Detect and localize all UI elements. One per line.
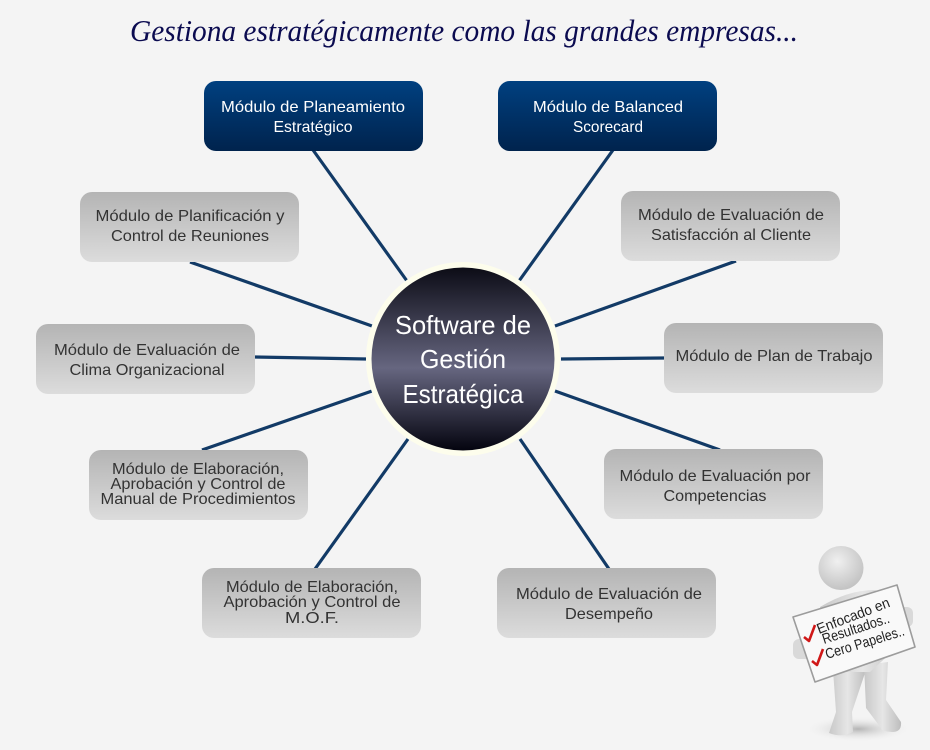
figure: right hand (895, 607, 913, 627)
module: Satisfacción al Cliente (621, 191, 840, 261)
module: Desempeño (497, 568, 716, 638)
figure: sign (793, 585, 915, 682)
figure: sign text: Resultados.. (820, 611, 892, 648)
module: Manual de Procedimientos: Aprobación y Control de (110, 476, 286, 493)
central hub: Software de Gestión Estratégica: Estratégica (402, 379, 524, 409)
module: Balanced Scorecard: Scorecard (573, 119, 643, 136)
figure: floor shadow (804, 716, 912, 742)
module: Evaluación por Competencias: Competencias (664, 488, 766, 505)
module: M.O.F.: Módulo de Elaboración, (226, 579, 398, 596)
central hub: Software de Gestión Estratégica (366, 262, 560, 456)
module: Planificación y Control de Reuniones: Control de Reuniones (111, 228, 269, 245)
figure: sign text: Enfocado en (815, 595, 892, 638)
module: Manual de Procedimientos (89, 450, 308, 520)
module: Satisfacción al Cliente: Satisfacción al Cliente (651, 227, 811, 244)
figure: red check marks (804, 625, 823, 665)
module: Balanced Scorecard: Módulo de Balanced (533, 99, 683, 116)
module: Satisfacción al Cliente: Módulo de Evaluación de (638, 207, 824, 224)
module: Desempeño: Desempeño (565, 606, 653, 623)
connector lines (190, 150, 736, 569)
figure: sign text: Cero Papeles.. (823, 624, 907, 663)
module: Planeamiento Estratégico (204, 81, 423, 151)
module: Planificación y Control de Reuniones: Módulo de Planificación y (96, 208, 284, 225)
module: Clima Organizacional: Clima Organizacional (70, 362, 224, 379)
central hub: Software de Gestión Estratégica: Gestión (420, 344, 506, 374)
module: Clima Organizacional: Módulo de Evaluación de (54, 342, 240, 359)
module: M.O.F. (202, 568, 421, 638)
figure holding sign (793, 546, 915, 742)
figure: sign text (815, 595, 907, 663)
module: Manual de Procedimientos: Módulo de Elaboración, (112, 461, 284, 478)
module: Plan de Trabajo (664, 323, 883, 393)
figure: left hand (793, 639, 811, 659)
module: Planeamiento Estratégico: Estratégico (274, 119, 353, 136)
figure: torso (820, 590, 905, 672)
module: M.O.F.: Aprobación y Control de (224, 594, 401, 611)
module: Planeamiento Estratégico: Módulo de Planeamiento (221, 99, 405, 116)
figure: legs (829, 662, 901, 735)
title: Gestiona estratégicamente como las grandes empresas... (130, 13, 798, 48)
module: Planificación y Control de Reuniones (80, 192, 299, 262)
module: Manual de Procedimientos: Manual de Procedimientos (100, 491, 296, 508)
module: Clima Organizacional (36, 324, 255, 394)
module: Evaluación por Competencias: Módulo de Evaluación por (620, 468, 811, 485)
figure: head (818, 546, 864, 590)
central hub: Software de Gestión Estratégica: Software de (395, 310, 531, 340)
module: Plan de Trabajo: Módulo de Plan de Trabajo (676, 348, 873, 365)
module: Evaluación por Competencias (604, 449, 823, 519)
module: M.O.F.: M.O.F. (285, 610, 339, 627)
module: Balanced Scorecard (498, 81, 717, 151)
module: Desempeño: Módulo de Evaluación de (516, 586, 702, 603)
